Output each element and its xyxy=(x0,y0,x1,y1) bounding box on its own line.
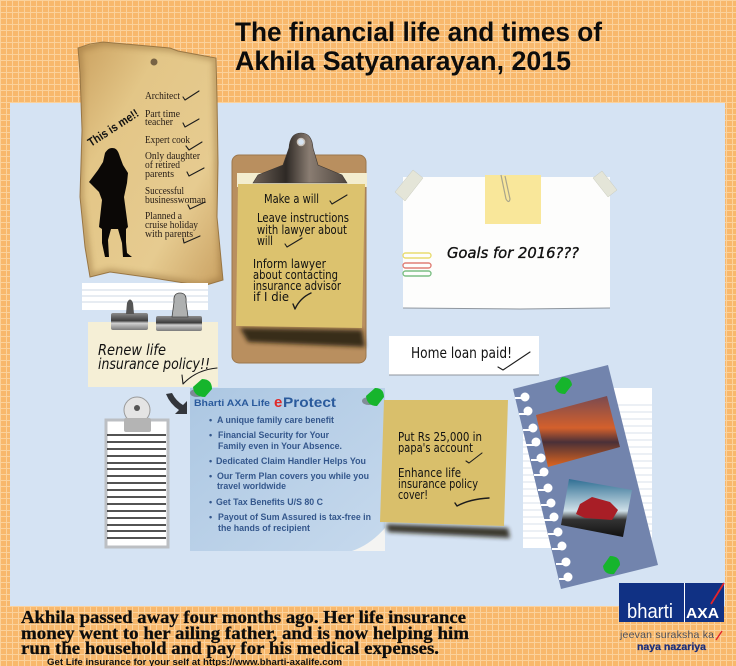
bullet list: Payout of Sum Assured is tax-free in xyxy=(218,512,371,522)
label: this is me: This is me!! xyxy=(85,106,141,150)
bullet list: • xyxy=(209,512,212,522)
white sheet xyxy=(106,420,168,547)
tagline second line: naya nazariya xyxy=(637,642,706,653)
card heading: e xyxy=(274,394,282,411)
action text xyxy=(398,430,482,502)
panel: notebook with photos xyxy=(513,365,658,589)
action text: cover! xyxy=(398,488,428,502)
goals text: Goals for 2016??? xyxy=(447,244,579,262)
tagline: jeevan suraksha ka xyxy=(619,629,714,641)
bullet list xyxy=(209,415,371,533)
panel: yellow note with actions xyxy=(380,400,510,538)
AXA wordmark: AXA xyxy=(686,605,719,622)
attribute list: Expert cook xyxy=(145,134,190,146)
attribute list: of retired xyxy=(145,159,180,171)
bullet list: • xyxy=(209,497,212,507)
spiral holes xyxy=(515,393,572,581)
blue badge xyxy=(619,583,724,622)
panel: goals for 2016 xyxy=(395,170,617,309)
white sheet xyxy=(403,177,610,309)
home loan text: Home loan paid! xyxy=(411,344,512,362)
attribute list: Architect xyxy=(145,90,180,102)
card heading xyxy=(194,394,336,411)
footer story text: Akhila passed away four months ago. Her life insurance xyxy=(21,607,466,627)
coloured paper clips xyxy=(403,253,431,276)
burn mark xyxy=(150,58,158,66)
renew text: insurance policy!! xyxy=(98,355,210,373)
bullet list: A unique family care benefit xyxy=(217,415,334,425)
blue notebook sheet xyxy=(513,365,658,589)
cream sheet xyxy=(237,173,367,187)
silhouette of woman xyxy=(89,148,132,257)
icon: pin bottom xyxy=(603,556,620,574)
lined paper strip xyxy=(82,283,208,310)
to-do text: with lawyer about xyxy=(257,223,347,237)
icon: green pin left xyxy=(190,379,212,397)
clip ring xyxy=(297,138,305,146)
yellow sticky xyxy=(485,175,541,224)
round clip xyxy=(124,397,151,432)
title: Akhila Satyanarayan, 2015 xyxy=(235,46,571,76)
attribute list: Part time xyxy=(145,108,180,120)
paper clip xyxy=(501,175,510,202)
check marks xyxy=(285,195,347,309)
panel: eProtect product card xyxy=(190,388,385,551)
check marks xyxy=(183,91,205,243)
bullet list: • xyxy=(209,456,212,466)
icon: curved arrow xyxy=(166,393,187,414)
attribute list: cruise holiday xyxy=(145,219,198,231)
sheet shadow edge xyxy=(403,308,610,309)
action text: insurance policy xyxy=(398,477,478,491)
torn parchment xyxy=(78,42,223,286)
attribute list: with parents xyxy=(145,228,193,240)
parchment aged edges xyxy=(78,42,223,286)
photo: red car xyxy=(561,479,632,537)
footer story text xyxy=(21,607,469,658)
panel: parchment profile xyxy=(78,42,223,286)
check marks xyxy=(455,453,489,506)
card background xyxy=(190,388,385,551)
card heading: Protect xyxy=(283,394,336,410)
logo: Bharti AXA xyxy=(619,583,724,653)
cream note xyxy=(88,322,218,387)
action text: Enhance life xyxy=(398,466,461,480)
to-do text: will xyxy=(257,234,273,248)
note shadow xyxy=(240,328,365,347)
bullet list: Our Term Plan covers you while you xyxy=(217,471,369,481)
check mark xyxy=(498,352,530,370)
yellow sticky note xyxy=(236,184,365,328)
bharti wordmark: bharti xyxy=(627,601,673,623)
to-do text: if I die xyxy=(253,290,289,304)
renew text xyxy=(98,341,210,373)
bullet list: • xyxy=(209,430,212,440)
note shadow xyxy=(386,524,510,538)
pale blue board panel xyxy=(10,103,725,606)
red slash xyxy=(711,583,724,604)
attribute list: parents xyxy=(145,168,174,180)
panel: small clipboard with lines xyxy=(106,397,168,547)
action text: Put Rs 25,000 in xyxy=(398,430,482,444)
bullet list: • xyxy=(209,471,212,481)
bullet list: Get Tax Benefits U/S 80 C xyxy=(216,497,323,507)
icon: pin top xyxy=(555,377,572,394)
bullet list: Family even in Your Absence. xyxy=(218,441,342,451)
to-do text: about contacting xyxy=(253,268,338,282)
title xyxy=(235,17,603,76)
panel: home loan note xyxy=(389,336,539,375)
attribute list: Planned a xyxy=(145,210,182,222)
to-do text: Make a will xyxy=(264,192,319,206)
photo: sunset xyxy=(536,396,620,467)
bullet list: Dedicated Claim Handler Helps You xyxy=(216,456,366,466)
to-do text xyxy=(253,192,349,304)
peeled corner xyxy=(352,528,385,551)
action text: papa's account xyxy=(398,441,473,455)
bullet list: • xyxy=(209,415,212,425)
attribute list: businesswoman xyxy=(145,194,206,206)
renew text: Renew life xyxy=(98,341,166,359)
binder clip right xyxy=(156,293,202,331)
white strip xyxy=(389,336,539,375)
panel: clipboard with to-do note xyxy=(232,133,367,363)
bullet list: Financial Security for Your xyxy=(218,430,329,440)
clipboard board xyxy=(232,155,366,363)
bullet list: the hands of recipient xyxy=(218,523,310,533)
tape left xyxy=(395,170,423,201)
card heading: Bharti AXA Life xyxy=(194,398,270,409)
attribute list: Successful xyxy=(145,185,184,197)
to-do text: insurance advisor xyxy=(253,279,341,293)
to-do text: Leave instructions xyxy=(257,211,349,225)
panel: renew policy note xyxy=(82,283,218,387)
bullet list: travel worldwide xyxy=(217,481,286,491)
sticky note xyxy=(380,400,508,526)
tape right xyxy=(593,171,617,197)
metal clip xyxy=(253,133,347,183)
attribute list: Only daughter xyxy=(145,150,200,162)
attribute list xyxy=(145,90,206,240)
check mark xyxy=(182,368,217,384)
tagline slash xyxy=(716,631,722,640)
title: The financial life and times of xyxy=(235,17,603,47)
attribute list: teacher xyxy=(145,116,173,128)
binder clip left xyxy=(111,300,148,330)
icon: green pin right xyxy=(362,388,384,406)
to-do text: Inform lawyer xyxy=(253,257,326,271)
footer story text: money went to her ailing father, and is now helping him xyxy=(21,623,469,643)
badge divider xyxy=(684,583,685,622)
lined page behind xyxy=(523,388,652,548)
black lines xyxy=(107,435,166,538)
strip bottom edge xyxy=(389,374,539,376)
footer story text: run the household and pay for his medical expenses. xyxy=(21,638,439,658)
